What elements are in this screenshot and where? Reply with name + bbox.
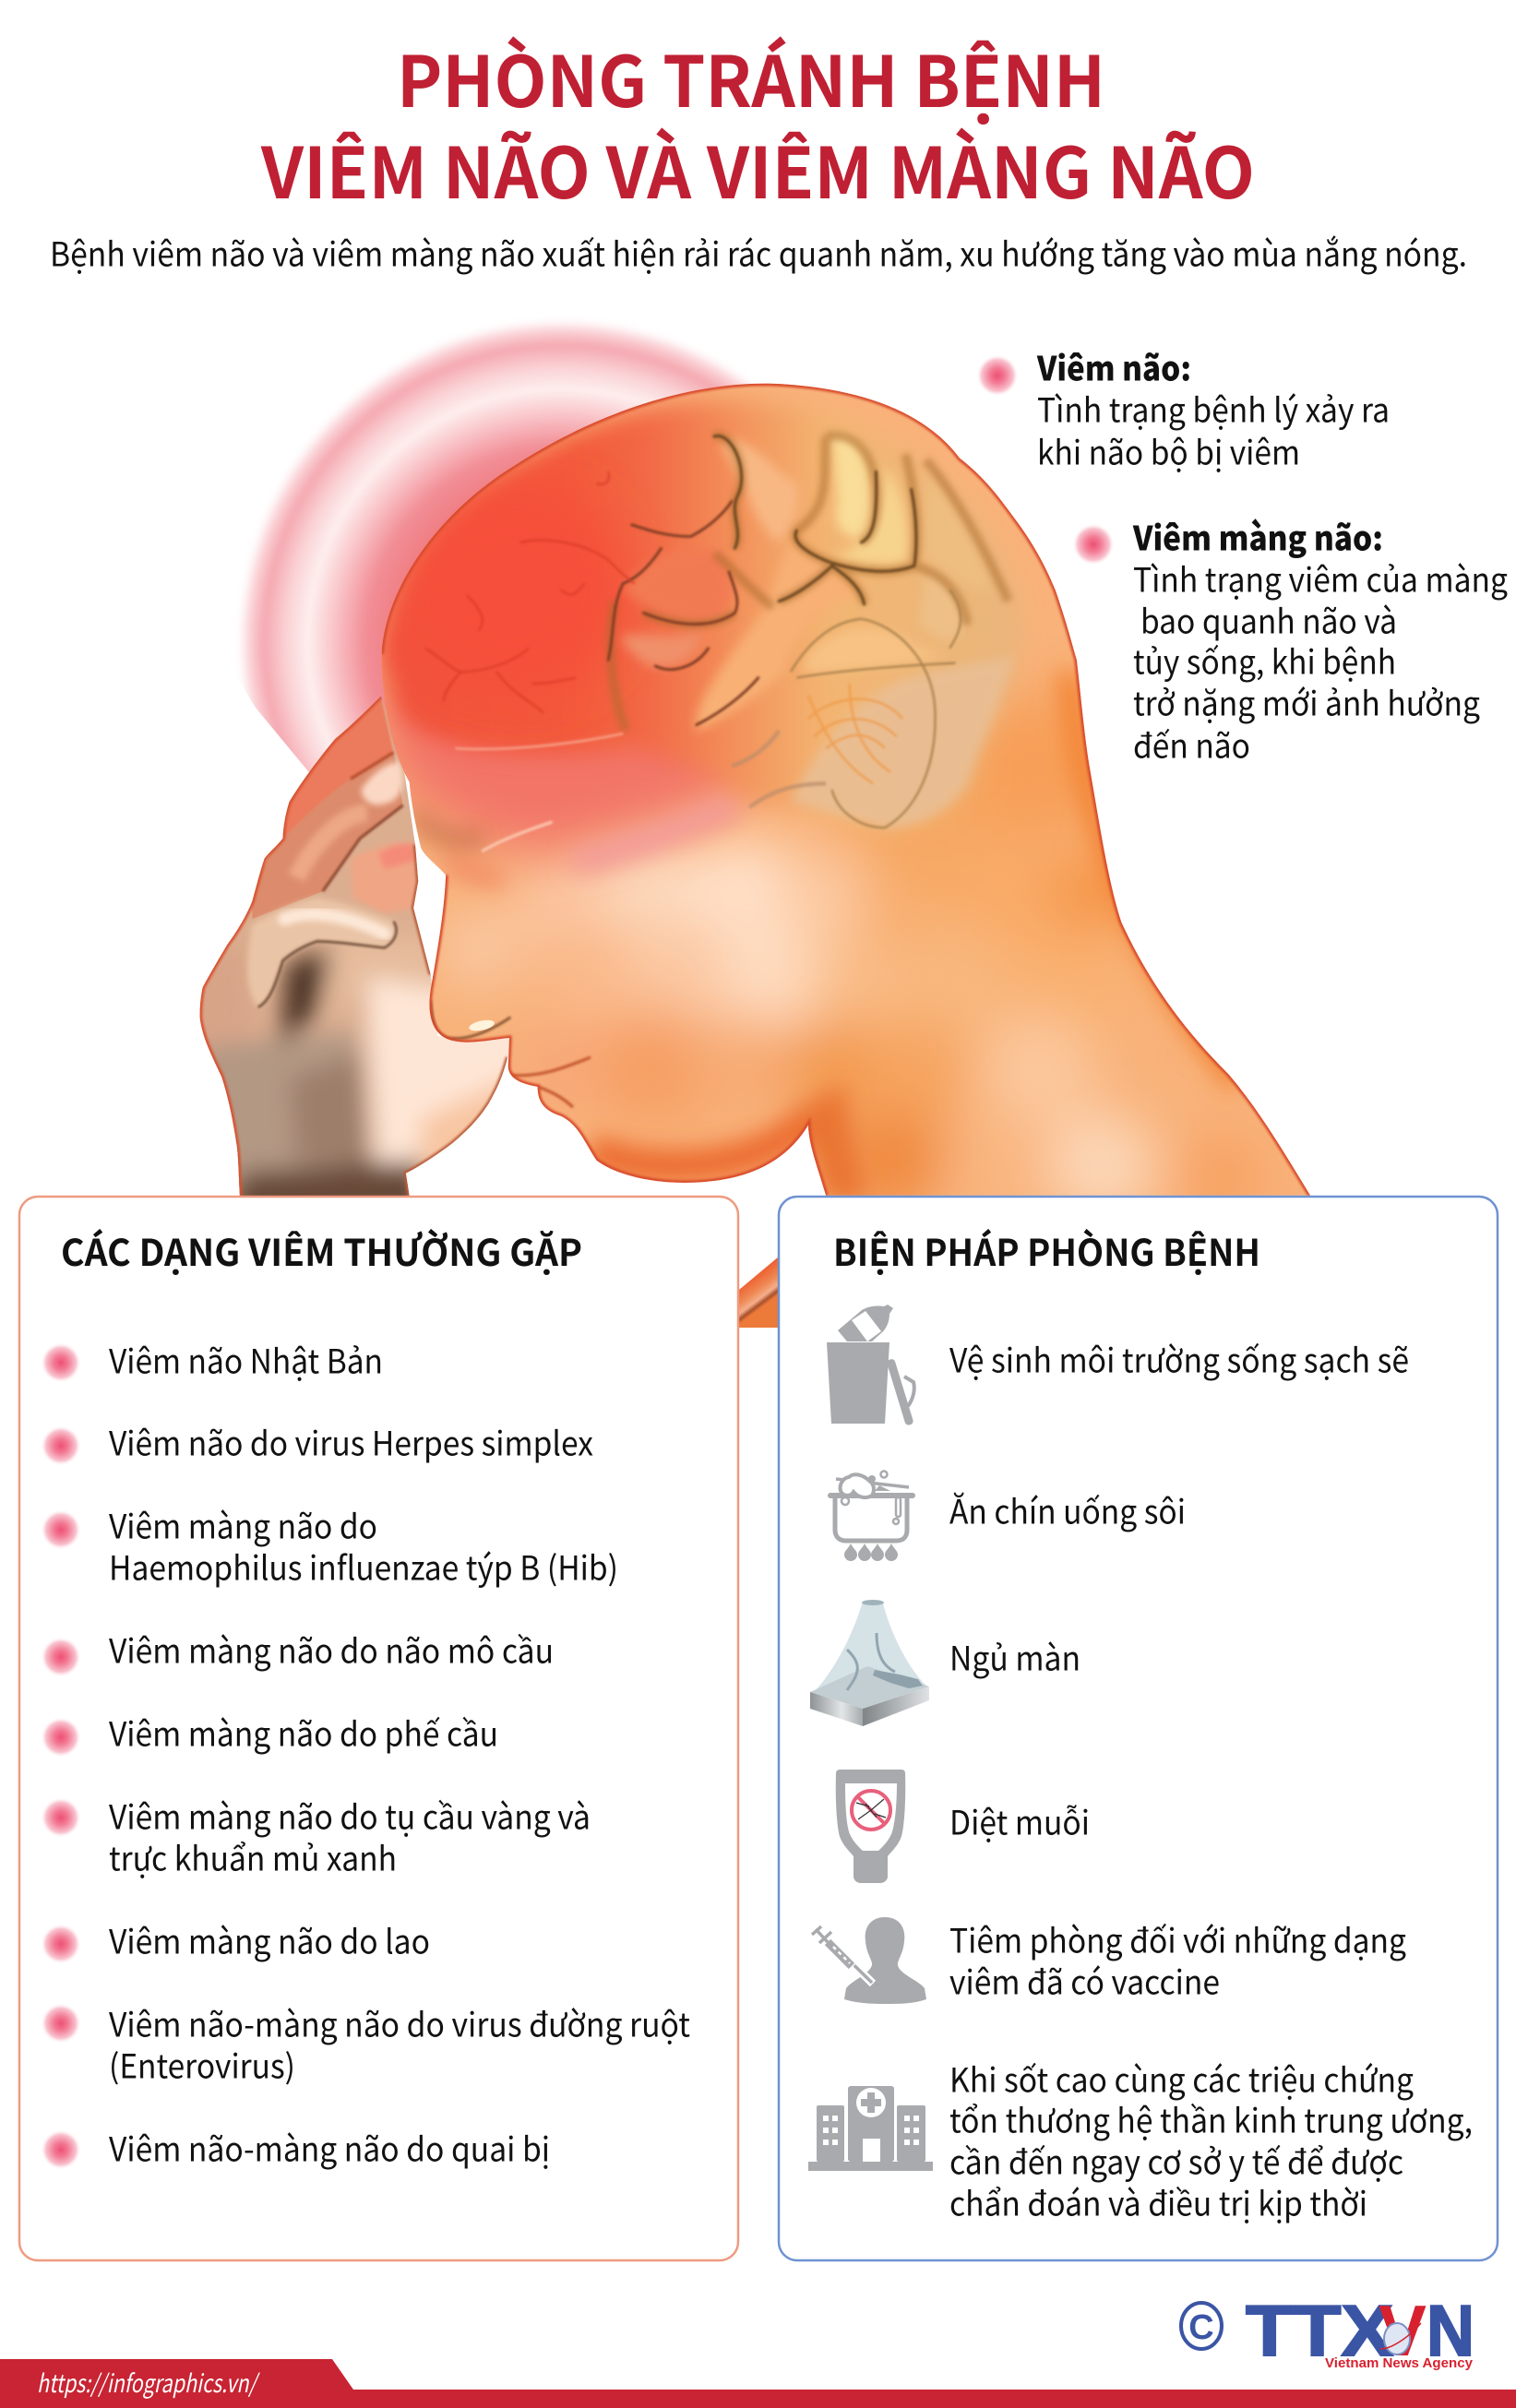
callout: meningitis definition [1072, 513, 1508, 768]
callout: encephalitis definition: Viêm não: [1036, 343, 1191, 391]
list item 2: Viêm não do virus Herpes simplex [109, 1417, 593, 1465]
illustration: head with inflamed brain [173, 316, 1332, 1219]
hand [199, 696, 509, 1196]
title [260, 26, 1255, 219]
callout: meningitis definition: bao quanh não và [1140, 596, 1397, 644]
pain rings [240, 321, 751, 772]
cerebellum detail [808, 684, 902, 783]
list item 4: Viêm màng não do não mô cầu [109, 1626, 554, 1674]
item: mosquito net: Ngủ màn [949, 1633, 1080, 1681]
brain [378, 399, 1021, 828]
callout: encephalitis definition: khi não bộ bị viêm [1037, 426, 1300, 474]
second finger [252, 753, 403, 919]
list item 6: trực khuẩn mủ xanh [109, 1832, 397, 1880]
forehead veins [425, 471, 635, 713]
item: see a doctor: chẩn đoán và điều trị kịp thời [949, 2177, 1367, 2225]
item: kill mosquitoes: Diệt muỗi [949, 1797, 1090, 1845]
list item 7: Viêm màng não do lao [109, 1915, 430, 1963]
item: vaccination: Tiêm phòng đối với những dạng [949, 1915, 1406, 1963]
item: clean environment: Vệ sinh môi trường sống sạch sẽ [949, 1334, 1409, 1382]
item: see a doctor: Khi sốt cao cùng các triệu chứng [949, 2054, 1414, 2102]
title: VIÊM NÃO VÀ VIÊM MÀNG NÃO [260, 117, 1255, 219]
icon: repellent tube [836, 1770, 905, 1883]
third finger [351, 843, 418, 913]
inflamed forehead glow [373, 672, 749, 854]
nose, mouth and outline [431, 1001, 510, 1039]
logo: TTXVN: TTX [1246, 2290, 1393, 2371]
list item 8 [41, 1998, 690, 2089]
skin colour field [437, 696, 1261, 1219]
icon: boiling pot [828, 1471, 915, 1561]
logo: TTXVN: Vietnam News Agency [1325, 2355, 1474, 2371]
item: mosquito net [810, 1600, 1080, 1726]
icon: hospital [808, 2086, 933, 2171]
callout: meningitis definition: Viêm màng não: [1132, 513, 1383, 561]
first finger [283, 696, 393, 839]
icon: mosquito net over mattress [810, 1600, 929, 1726]
item: vaccination [812, 1915, 1406, 2004]
icon: trash bin and bottle [827, 1305, 914, 1426]
item: kill mosquitoes [836, 1770, 1090, 1883]
list item 1: Viêm não Nhật Bản [109, 1336, 383, 1384]
title: PHÒNG TRÁNH BỆNH [397, 26, 1105, 127]
footer bar [0, 2359, 1516, 2408]
footer url: https://infographics.vn/ [37, 2364, 260, 2400]
callout: encephalitis definition [976, 343, 1390, 474]
list item 6: Viêm màng não do tụ cầu vàng và [109, 1792, 591, 1840]
list item 6 [41, 1792, 591, 1880]
callout: meningitis definition: tủy sống, khi bệnh [1133, 637, 1396, 685]
callout: meningitis definition: trở nặng mới ảnh hưởng [1133, 677, 1480, 725]
icon: person and syringe [812, 1917, 926, 2004]
logo: TTXVN [1181, 2290, 1474, 2371]
item: cooked food: Ăn chín uống sôi [949, 1485, 1186, 1533]
copyright mark [1181, 2303, 1222, 2349]
list item 5: Viêm màng não do phế cầu [109, 1709, 498, 1757]
sulci shadows [611, 435, 1009, 731]
heading: prevention: BIỆN PHÁP PHÒNG BỆNH [833, 1223, 1260, 1277]
list item 8: Viêm não-màng não do virus đường ruột [109, 1998, 690, 2046]
panel: prevention [779, 1197, 1498, 2260]
arm fragment between panels [739, 1257, 779, 1328]
list item 3: Haemophilus influenzae týp B (Hib) [109, 1543, 618, 1591]
panel: common forms [19, 1197, 738, 2260]
item: vaccination: viêm đã có vaccine [949, 1956, 1220, 2004]
head and neck [361, 366, 1332, 1219]
hand outline [200, 696, 381, 1196]
item: see a doctor: cần đến ngay cơ sở y tế để được [949, 2137, 1403, 2185]
item: clean environment [827, 1305, 1409, 1426]
copyright mark: C [1188, 2308, 1214, 2347]
list item 8: (Enterovirus) [109, 2041, 295, 2089]
gyri bodies [620, 436, 991, 731]
heading: common forms: CÁC DẠNG VIÊM THƯỜNG GẶP [61, 1223, 582, 1277]
item: see a doctor: tổn thương hệ thần kinh trung ương, [949, 2094, 1473, 2142]
thumb [247, 898, 397, 1007]
item: cooked food [828, 1471, 1186, 1561]
logo: TTXVN: N [1426, 2290, 1474, 2371]
list item 3 [41, 1500, 618, 1591]
item: see a doctor [808, 2054, 1473, 2225]
callout: encephalitis definition: Tình trạng bệnh lý xảy ra [1037, 384, 1390, 432]
list item 3: Viêm màng não do [109, 1500, 377, 1548]
list item 9: Viêm não-màng não do quai bị [109, 2124, 550, 2172]
logo: TTXVN: V [1379, 2290, 1426, 2371]
callout: meningitis definition: đến não [1133, 720, 1250, 768]
